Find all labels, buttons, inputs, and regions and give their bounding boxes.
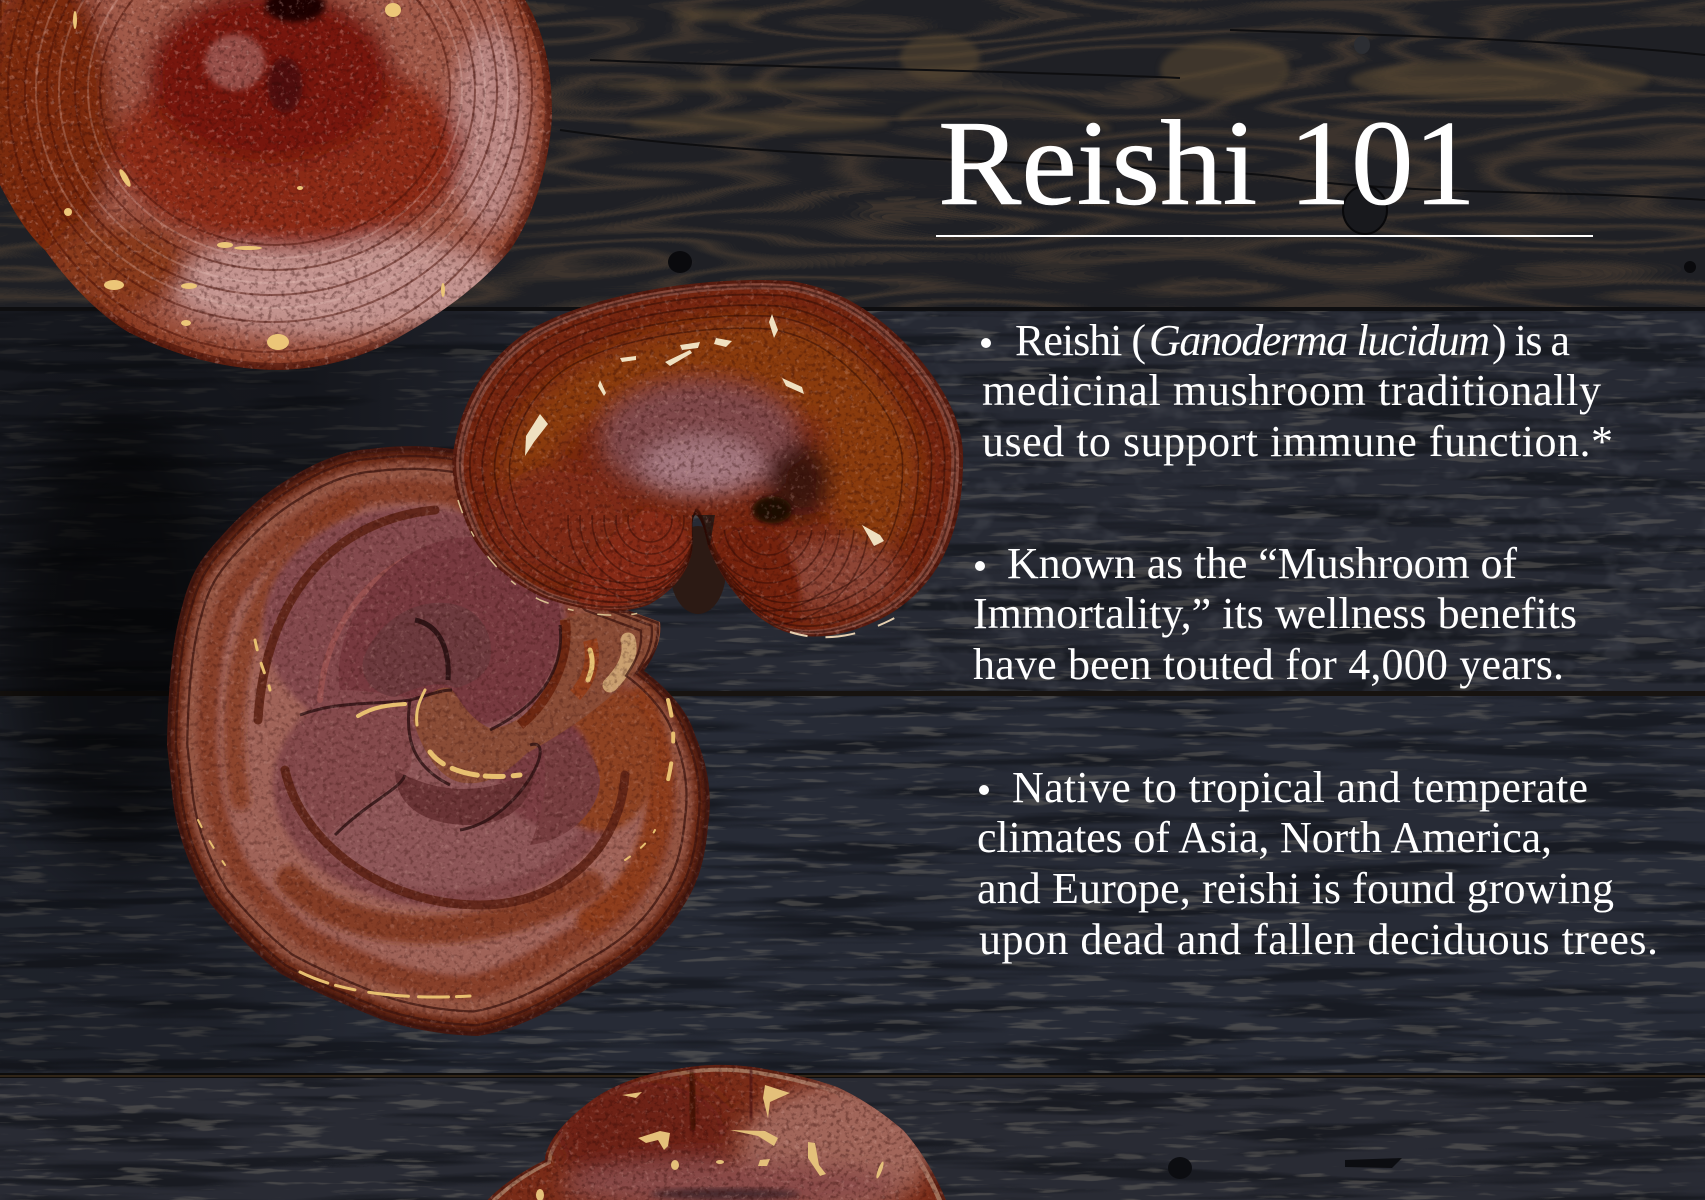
line 3: have been touted for 4,000 years. [973,640,1564,689]
bullet [981,338,991,348]
line 2: medicinal mushroom traditionally [982,366,1601,415]
bullet [979,785,989,795]
line 3: used to support immune function.* [982,417,1613,466]
line 2: climates of Asia, North America, [977,813,1552,862]
mushroom: large lower cap [167,446,710,1036]
stem band [413,613,662,783]
text block: what reishi is [981,316,1613,466]
upper curl outer lobe [339,537,560,725]
mushroom: top left cap [0,0,570,380]
title: Reishi 101 [938,96,1476,231]
line 2: Immortality,” its wellness benefits [973,589,1577,638]
text block: habitat [977,763,1658,964]
line 4: upon dead and fallen deciduous trees. [979,915,1658,964]
text block: history [973,539,1577,689]
line 1: Known as the “Mushroom of [1007,539,1517,588]
mushroom: bottom cap [480,1060,950,1200]
line 3: and Europe, reishi is found growing [977,864,1614,913]
bullet [975,561,985,571]
lower curl lobe right [530,753,600,845]
line 1 end: ) is a [1492,316,1570,365]
title rule [936,235,1593,237]
upper curl inner lobe [363,603,491,697]
line 1 latin name: Ganoderma lucidum [1149,316,1490,365]
lower curl lobe left [298,726,412,834]
mushroom: kidney shaped upper cap [452,280,964,638]
line 1: Native to tropical and temperate [1012,763,1588,812]
line 1 start: Reishi ( [1015,316,1146,365]
lower curl crescent [395,770,533,825]
